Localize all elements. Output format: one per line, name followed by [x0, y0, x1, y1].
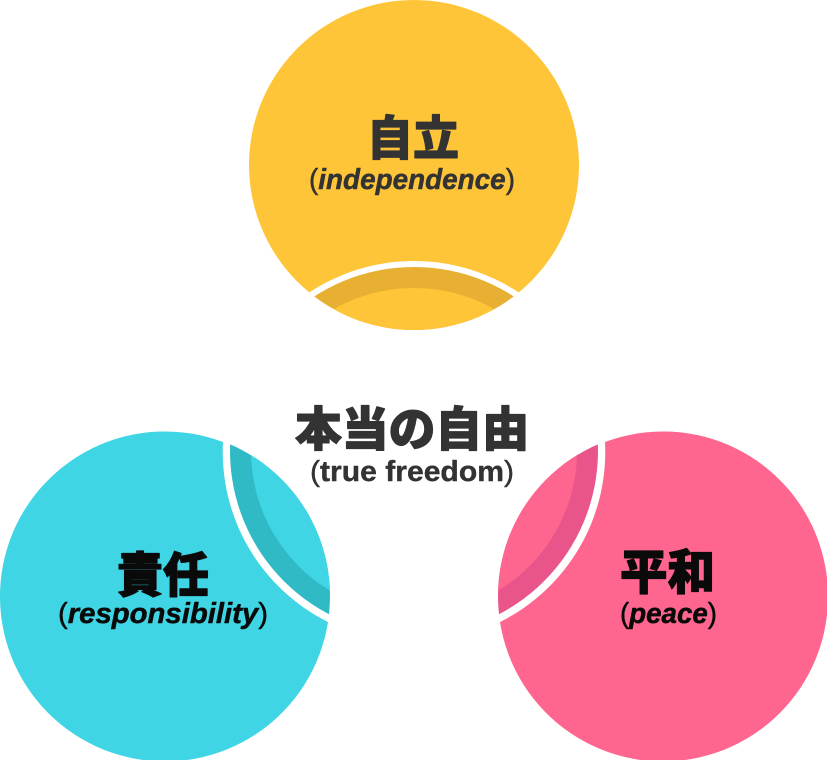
label: peace: 平和	[620, 547, 715, 600]
circle: peace	[498, 432, 827, 760]
label: peace: (peace)	[620, 598, 717, 630]
circle: independence	[249, 0, 579, 330]
label: responsibility	[58, 550, 268, 630]
title: true freedom	[295, 403, 529, 488]
label: independence: (independence)	[309, 164, 515, 196]
label: independence	[309, 112, 515, 196]
label: independence: 自立	[367, 112, 459, 165]
title: true freedom: 本当の自由	[295, 403, 529, 456]
label: responsibility: (responsibility)	[58, 598, 268, 630]
label: responsibility: 責任	[117, 550, 209, 603]
title: true freedom: (true freedom)	[310, 456, 514, 488]
label: peace	[620, 547, 717, 630]
circle: responsibility	[0, 432, 330, 760]
